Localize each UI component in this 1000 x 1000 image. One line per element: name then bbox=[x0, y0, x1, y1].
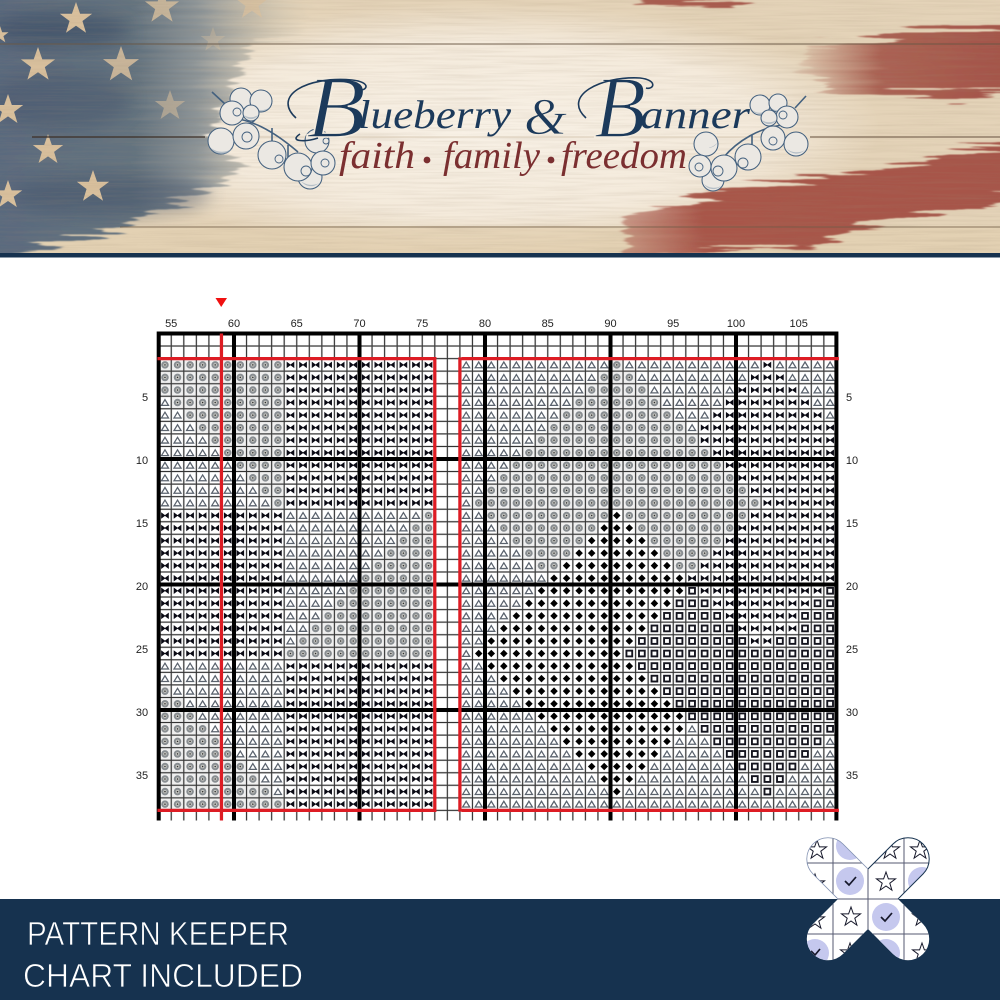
chart: grey circle stitches bbox=[160, 360, 760, 808]
chart: left row numbers: 10 bbox=[136, 455, 148, 467]
chart: right row numbers: 35 bbox=[846, 770, 858, 782]
chart: red page boxes and marker line bbox=[157, 334, 839, 820]
chart: top column numbers: 60 bbox=[228, 318, 240, 330]
chart: right row numbers: 10 bbox=[846, 455, 858, 467]
footer text: pattern keeper chart included: CHART INCLUDED bbox=[23, 957, 303, 994]
chart: top column numbers: 105 bbox=[790, 318, 808, 330]
chart: top column numbers: 65 bbox=[291, 318, 303, 330]
chart: left row numbers: 35 bbox=[136, 770, 148, 782]
header bottom border bbox=[0, 253, 1000, 258]
chart: left row numbers bbox=[136, 392, 148, 782]
chart: left row numbers: 30 bbox=[136, 707, 148, 719]
chart: black diamond stitches bbox=[474, 512, 684, 796]
logo wordmark: Blueberry & Banner: & bbox=[524, 89, 568, 146]
chart: right row numbers: 30 bbox=[846, 707, 858, 719]
logo wordmark: Blueberry & Banner: B bbox=[306, 60, 366, 157]
chart: right row numbers: 20 bbox=[846, 581, 858, 593]
logo wordmark: Blueberry & Banner bbox=[288, 60, 751, 157]
chart: right row numbers: 5 bbox=[846, 392, 852, 404]
chart: right row numbers: 15 bbox=[846, 518, 858, 530]
chart: top column numbers: 55 bbox=[165, 318, 177, 330]
chart: top column numbers: 75 bbox=[416, 318, 428, 330]
chart: left row numbers: 25 bbox=[136, 644, 148, 656]
footer text: pattern keeper chart included: PATTERN KEEPER bbox=[27, 915, 289, 952]
logo: left blueberry cluster bbox=[208, 88, 335, 189]
footer bar bbox=[0, 899, 1000, 1000]
footer text: pattern keeper chart included bbox=[23, 915, 303, 994]
logo tagline: faith family freedom: freedom bbox=[561, 135, 687, 177]
logo tagline: faith family freedom: family bbox=[443, 135, 540, 177]
chart: thick ten-stitch rulings bbox=[157, 334, 838, 820]
logo wordmark: Blueberry & Banner: lueberry bbox=[358, 92, 511, 137]
chart: right row numbers bbox=[846, 392, 858, 782]
chart: top column numbers: 80 bbox=[479, 318, 491, 330]
chart: left row numbers: 5 bbox=[142, 392, 148, 404]
chart: square stitches bbox=[624, 586, 834, 796]
chart: right row numbers: 25 bbox=[846, 644, 858, 656]
chart: top column numbers: 70 bbox=[353, 318, 366, 330]
cross-stitch chart grid bbox=[157, 334, 839, 820]
chart: top column numbers: 95 bbox=[667, 318, 679, 330]
logo: right blueberry cluster bbox=[689, 94, 808, 191]
logo tagline: faith family freedom bbox=[339, 135, 687, 177]
chart: left row numbers: 20 bbox=[136, 581, 148, 593]
logo wordmark: Blueberry & Banner: anner bbox=[640, 92, 751, 137]
chart: bowtie stitches bbox=[159, 334, 836, 810]
header banner: rustic wooden flag bbox=[0, 0, 1000, 262]
logo wordmark: Blueberry & Banner: B bbox=[594, 60, 646, 157]
chart: top column numbers: 100 bbox=[727, 318, 745, 330]
logo tagline: faith family freedom: faith bbox=[339, 135, 415, 177]
chart: triangle stitches bbox=[161, 337, 834, 807]
icon: pattern keeper x logo bbox=[806, 837, 930, 960]
chart: top column numbers: 85 bbox=[542, 318, 554, 330]
chart: red position marker bbox=[216, 298, 227, 307]
chart: left row numbers: 15 bbox=[136, 518, 148, 530]
chart: top column numbers bbox=[165, 318, 808, 330]
chart: top column numbers: 90 bbox=[604, 318, 617, 330]
